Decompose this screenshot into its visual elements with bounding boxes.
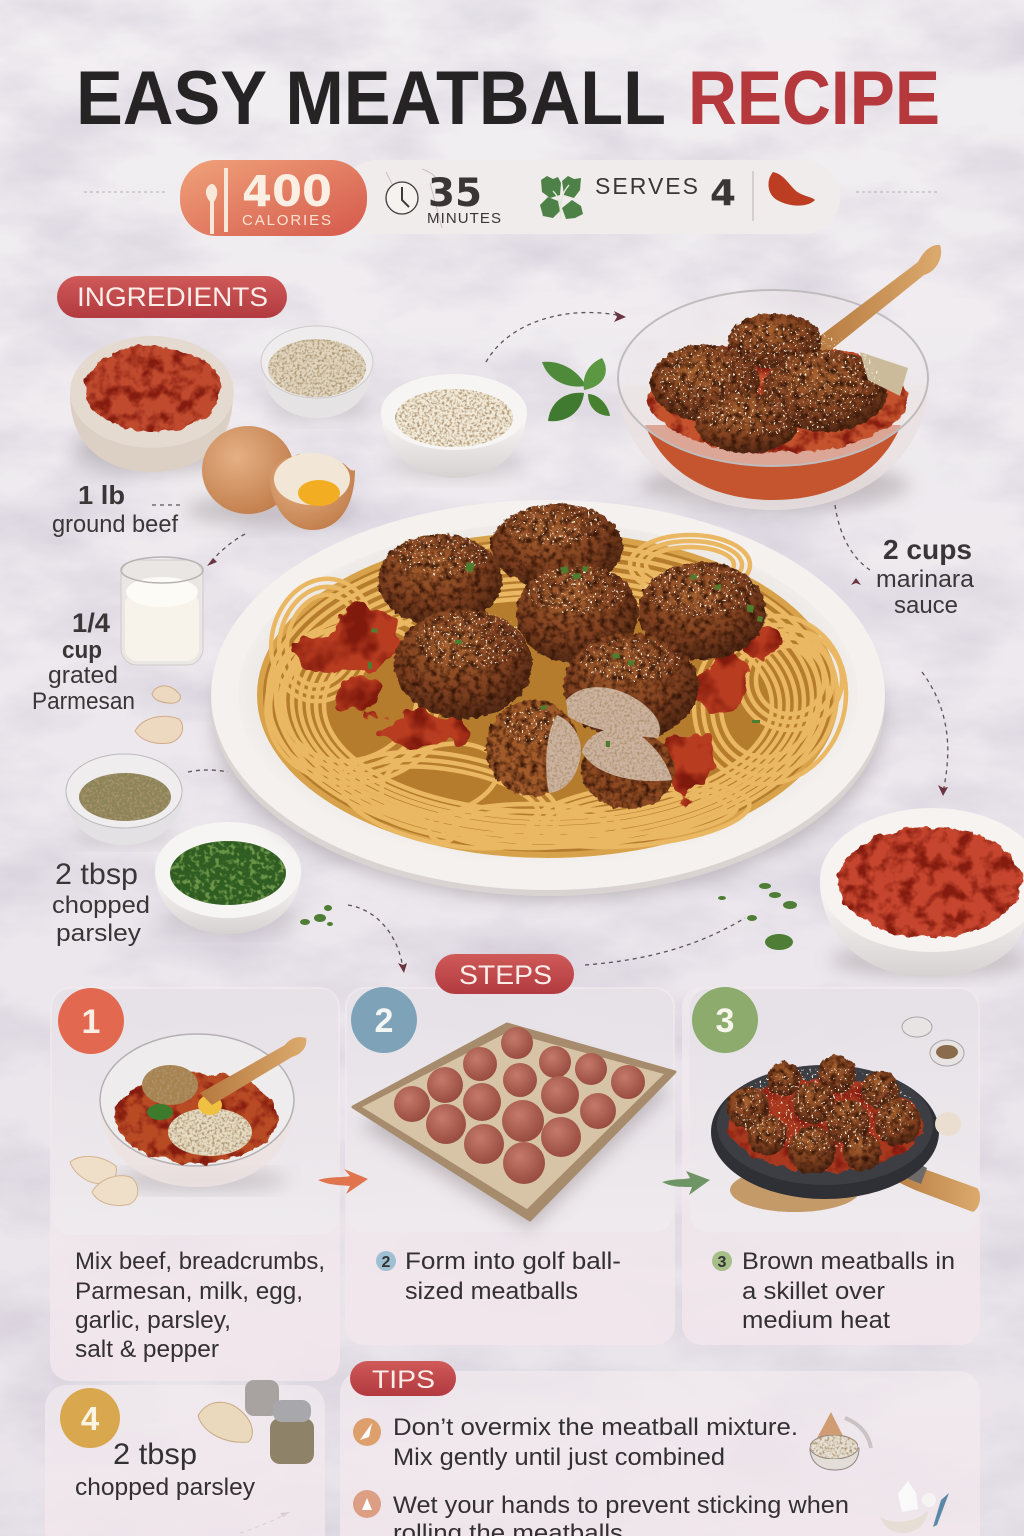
ingredient labels: sauce [894,592,958,619]
garlic and spice shakers [198,1380,314,1464]
step 2 text: sized meatballs [405,1278,578,1305]
baking tray with raw meatballs [353,1024,675,1230]
arrow: step 2 to 3 [662,1171,710,1195]
ingredients heading [57,276,287,318]
cut meatball faces [546,687,672,793]
serves stat: 4 [710,173,736,214]
ingredient labels: 2 cups [883,534,972,565]
ingredient labels: 1 lb [78,480,125,510]
icon: parsley sprig [540,176,583,219]
icon: bowl with cone [810,1412,871,1470]
step 2 number badge [351,987,417,1053]
step 1 text [75,1248,325,1363]
dashed connector arrows [152,311,948,1533]
icon: basil leaves [542,358,610,421]
ingredient: white bowl of breadcrumbs [381,374,527,478]
step 1 number badge [58,988,124,1054]
mixing bowl illustration [100,1034,306,1190]
step 3 number badge: 3 [716,1002,734,1040]
step 3 text: a skillet over [742,1278,885,1305]
ingredient: garlic cloves [135,686,183,744]
tips heading [350,1361,456,1396]
step 3 number badge [692,987,758,1053]
ingredient labels: grated [48,662,118,689]
ingredient: eggs [185,426,355,530]
step 1 text: garlic, parsley, [75,1307,231,1334]
step 4 number badge: 4 [81,1400,100,1437]
ingredient: milk glass [121,557,203,665]
tip 2: Wet your hands to prevent sticking when [393,1492,849,1519]
panel: step 1 [50,987,340,1381]
panel: tips [340,1361,980,1536]
serves stat [595,171,753,221]
calories pill: 400 [242,167,332,217]
step 4 text: 2 tbsp [113,1438,197,1471]
garlic cloves [70,1156,138,1206]
tip 2 [353,1490,849,1536]
panel: step 2 [345,987,675,1345]
ingredient labels: Parmesan [32,688,135,715]
calories pill [180,160,367,236]
steps heading: STEPS [459,960,552,990]
serves stat: SERVES [595,173,698,199]
step 2 text: Form into golf ball- [405,1248,621,1275]
icon: clock [386,169,442,228]
parmesan flecks [390,505,755,743]
ingredient labels: cup [62,637,102,664]
herb flecks [368,562,763,747]
glass bowl of meatballs [618,245,941,510]
sauce bowl right [820,808,1024,977]
icon: wooden spoon [812,245,941,354]
panel: step 4 [45,1380,325,1536]
calories pill: CALORIES [242,212,331,229]
ingredient: breadcrumbs glass bowl [261,326,373,419]
tip 1 [353,1414,798,1471]
spice dishes [902,1017,964,1136]
tip 1: Mix gently until just combined [393,1444,725,1471]
ingredient labels [32,480,975,947]
dinner plate with spaghetti and meatballs [211,500,885,900]
step 2 text: 2 [382,1254,391,1271]
spaghetti [243,535,868,863]
step 1 text: salt & pepper [75,1336,219,1363]
ingredient: dried herb glass bowl [66,754,183,845]
tip 1: Don’t overmix the meatball mixture. [393,1414,798,1441]
step 1 text: Mix beef, breadcrumbs, [75,1248,325,1275]
ingredient labels: ground beef [52,511,178,538]
title: EASY MEATBALL [76,56,666,141]
stats bar [84,160,940,236]
ingredient labels: parsley [56,920,141,947]
step 3 text: medium heat [742,1307,890,1334]
icon: chili [768,172,815,206]
meatballs [368,504,766,809]
icon: salt pile and bowl [880,1481,949,1533]
skillet with meatballs [711,1055,980,1212]
step 3 text: Brown meatballs in [742,1248,955,1275]
ingredient: parsley bowl [155,822,301,934]
step 2 text [376,1248,621,1305]
step 3 text: 3 [718,1254,727,1271]
steps heading [435,954,574,994]
title: RECIPE [688,56,940,141]
ingredient labels: 2 tbsp [55,858,138,891]
ingredient: sauce bowl [70,336,237,472]
minutes stat: 35 [428,171,482,216]
step 3 text [712,1248,955,1334]
step 4 text: chopped parsley [75,1474,255,1501]
ingredients heading: INGREDIENTS [77,282,268,312]
ingredient labels: chopped [52,892,150,919]
minutes stat: MINUTES [427,210,501,227]
plate [211,500,885,896]
step 1 text: Parmesan, milk, egg, [75,1278,303,1305]
step 4 number badge [60,1388,120,1448]
minutes stat [427,171,501,227]
panel: step 3 [682,987,980,1345]
ingredient labels: marinara [876,566,975,593]
step 1 number badge: 1 [82,1003,100,1041]
ingredient labels: 1/4 [72,608,110,638]
tomato sauce chunks [295,610,789,806]
scattered parsley flakes [300,883,797,950]
step 2 number badge: 2 [375,1002,393,1040]
step 4 text [75,1438,255,1501]
arrow: step 1 to 2 [318,1169,368,1194]
tips heading: TIPS [372,1366,435,1394]
